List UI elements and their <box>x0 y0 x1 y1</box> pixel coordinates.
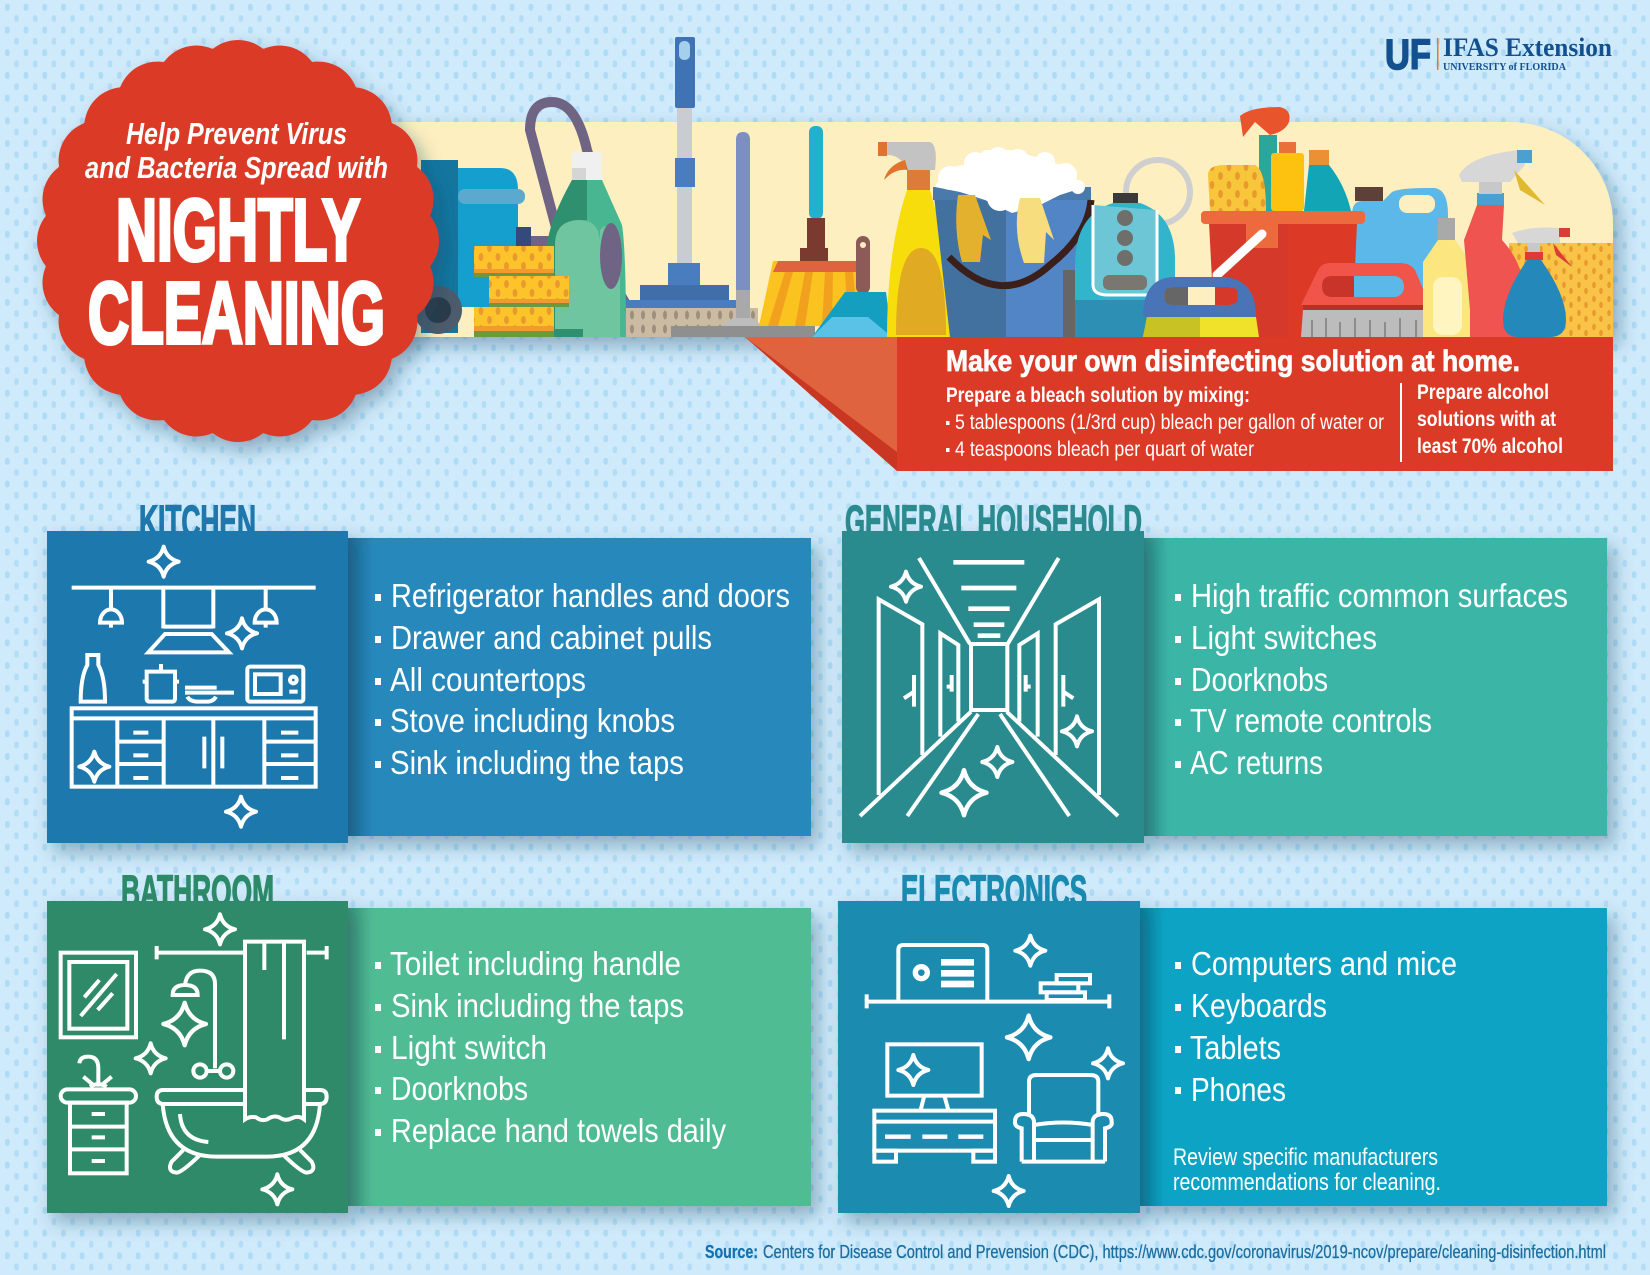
illustration: blue jug <box>1352 187 1448 300</box>
panel: disinfecting fold <box>745 337 897 471</box>
heading: bathroom: BATHROOM <box>121 866 274 917</box>
illustration: blue scrub brush <box>1143 277 1259 337</box>
panel: electronics list: Tablets <box>1190 1029 1281 1066</box>
title: help prevent: and Bacteria Spread with <box>85 150 388 185</box>
logo: UF IFAS Extension: IFAS Extension <box>1443 33 1613 62</box>
panel: bathroom list: Toilet including handle <box>390 945 681 982</box>
panel: general household list <box>1144 538 1607 836</box>
panel: bathroom list: Doorknobs <box>391 1070 528 1107</box>
panel: electronics list: Phones <box>1191 1071 1286 1108</box>
illustration: teal steamer device <box>1063 160 1190 337</box>
panel: bathroom list: Sink including the taps <box>391 987 684 1024</box>
title: nightly cleaning <box>88 182 385 362</box>
text: bleach solution: Prepare a bleach solution by mixing: <box>946 384 1250 407</box>
title: nightly cleaning: CLEANING <box>88 265 385 362</box>
title: help prevent: Help Prevent Virus <box>126 116 347 151</box>
panel: kitchen list <box>348 538 811 836</box>
panel: bathroom list: Replace hand towels daily <box>391 1112 726 1149</box>
panel: general household list: AC returns <box>1190 744 1323 781</box>
heading: electronics: ELECTRONICS <box>901 866 1087 917</box>
panel: disinfecting solution <box>897 337 1613 471</box>
panel: electronics list: Computers and mice <box>1191 945 1457 982</box>
panel: general household icon <box>842 531 1144 843</box>
logo: UF IFAS Extension <box>1385 31 1613 79</box>
panel: bathroom list: Light switch <box>391 1029 547 1066</box>
illustration: yellow spray bottle <box>878 142 951 337</box>
illustration: green detergent bottle <box>547 152 626 337</box>
panel: kitchen list: All countertops <box>390 661 586 698</box>
panel: electronics icon <box>838 901 1140 1213</box>
text: alcohol solution: solutions with at <box>1417 408 1556 431</box>
illustration: red bucket <box>1201 211 1365 337</box>
panel: general household list: Doorknobs <box>1191 661 1328 698</box>
heading: kitchen: KITCHEN <box>139 496 256 547</box>
panel: general household list: Light switches <box>1191 619 1377 656</box>
text: bleach solution: 5 tablespoons (1/3rd cup) bleach per gallon of water or <box>955 411 1384 434</box>
badge: nightly cleaning seal <box>33 36 443 446</box>
note: manufacturers recommendations: Review specific manufacturers <box>1173 1144 1438 1171</box>
illustration: red spray bottle <box>1459 150 1545 337</box>
panel: general household list: TV remote controls <box>1190 702 1432 739</box>
illustration: blue bucket with foam and gloves <box>933 147 1091 337</box>
panel: kitchen list: Drawer and cabinet pulls <box>391 619 712 656</box>
panel: cleaning supplies shelf <box>390 122 1613 337</box>
heading: make your own solution: Make your own disinfecting solution at home. <box>946 345 1520 378</box>
panel: bathroom icon <box>47 901 348 1213</box>
panel: kitchen list: Stove including knobs <box>390 702 675 739</box>
illustration: broom <box>759 126 858 326</box>
panel: kitchen icon <box>47 531 348 843</box>
panel: kitchen list: Refrigerator handles and doors <box>391 577 790 614</box>
illustration: yellow sponge right <box>1509 243 1613 337</box>
logo: UF IFAS Extension: UNIVERSITY of FLORIDA <box>1443 61 1566 73</box>
text: alcohol solution: least 70% alcohol <box>1417 435 1563 458</box>
heading: general household: GENERAL HOUSEHOLD <box>845 496 1142 547</box>
illustration: stacked sponges <box>474 246 569 337</box>
illustration: red scrub brush <box>1301 263 1430 337</box>
illustration: mop <box>626 37 758 337</box>
illustration: bottles in red bucket <box>1208 107 1351 215</box>
source line: Source: <box>705 1242 758 1262</box>
text: alcohol solution <box>1417 381 1563 458</box>
illustration: small yellow bottle <box>1423 218 1471 337</box>
text: bleach solution <box>946 384 1384 461</box>
panel: electronics list: Keyboards <box>1191 987 1327 1024</box>
title: nightly cleaning: NIGHTLY <box>116 182 360 279</box>
note: manufacturers recommendations <box>1173 1144 1441 1196</box>
illustration: vacuum cleaner <box>414 102 634 334</box>
panel: electronics list <box>1140 908 1607 1206</box>
text: alcohol solution: Prepare alcohol <box>1417 381 1549 404</box>
note: manufacturers recommendations: recommendations for cleaning. <box>1173 1169 1441 1196</box>
logo: UF IFAS Extension: UF <box>1385 31 1431 79</box>
illustration: squeegee <box>671 132 815 337</box>
title: help prevent <box>85 116 388 185</box>
illustration: blue spray bottle <box>1503 228 1572 337</box>
illustration: dustpan <box>812 236 892 337</box>
text: bleach solution: 4 teaspoons bleach per quart of water <box>955 438 1254 461</box>
panel: bathroom list <box>348 908 811 1206</box>
panel: general household list: High traffic common surfaces <box>1191 577 1568 614</box>
panel: kitchen list: Sink including the taps <box>390 744 684 781</box>
